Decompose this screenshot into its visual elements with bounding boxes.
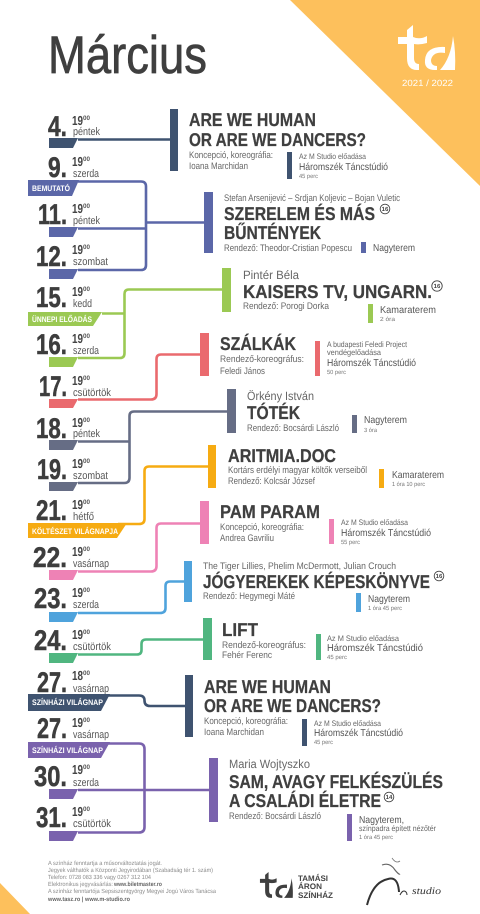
date: 16: 19 [72, 331, 83, 346]
text block: Rendező-koreográfus: [220, 354, 304, 365]
text block: BŰNTÉNYEK [224, 222, 322, 243]
date: 19: 00 [83, 458, 90, 465]
text block: Rendező: Porogi Dorka [243, 301, 330, 312]
date: 27 evening 19: 19 [72, 715, 83, 730]
text block: Rendező: Theodor-Cristian Popescu [224, 243, 352, 254]
venue [287, 152, 388, 180]
event: Kaisers TV, Ungarn [28, 268, 442, 367]
date: 15: kedd [73, 298, 92, 310]
badge: Színházi világnap [28, 694, 110, 711]
venue: színpadra épített nézőtér [359, 824, 436, 833]
date: 24: csütörtök [73, 641, 111, 653]
connector [118, 445, 216, 524]
text block: 16 [382, 206, 389, 213]
text block: Andrea Gavriliu [220, 533, 274, 544]
text block: OR ARE WE DANCERS? [204, 695, 381, 716]
logo: M Studio: studio [412, 886, 441, 897]
text block: JÓGYEREKEK KÉPESKÖNYVE [203, 571, 430, 592]
text block: PAM PARAM [220, 501, 320, 522]
text block: ARITMIA.DOC [228, 445, 336, 466]
logo: Tamási Áron Színház: SZÍNHÁZ [298, 890, 333, 900]
venue [316, 634, 423, 661]
text block: SAM, AVAGY FELKÉSZÜLÉS [229, 771, 443, 792]
text block: Maria Wojtyszko [229, 757, 310, 771]
text block: ARE WE HUMAN [189, 109, 316, 130]
date: 4: 19 [72, 113, 83, 128]
text block [220, 501, 320, 544]
date: 21: hétfő [73, 511, 94, 523]
venue: 45 perc [299, 173, 318, 180]
date: 21: 00 [83, 499, 90, 506]
event: Lift [49, 618, 423, 663]
venue: 1 óra 45 perc [368, 605, 402, 612]
date: 23: 19 [72, 585, 83, 600]
date: 23: 23. [34, 583, 67, 615]
badge: Színházi világnap [28, 742, 110, 758]
date: 16 [36, 329, 100, 361]
date: 24: 00 [83, 629, 90, 636]
venue: 45 perc [327, 654, 347, 661]
date: 12: 19 [72, 242, 83, 257]
venue: Nagyterem [368, 594, 410, 605]
date: 19: 19 [72, 456, 83, 471]
date: 27 evening 18: 18 [72, 668, 83, 683]
connector [49, 618, 212, 663]
event: Jógyerekek képeskönyve [49, 561, 444, 622]
text block [204, 676, 381, 738]
text block: 14 [386, 794, 393, 801]
date: 18: péntek [73, 428, 100, 440]
text block: Koncepció, koreográfia: [204, 716, 288, 727]
footer information: Telefon: 0728 083 336 vagy 0267 312 104 [48, 874, 152, 881]
venue: Az M Studio előadása [314, 719, 381, 728]
venue: Az M Studio előadása [299, 152, 366, 161]
text block: Fehér Ferenc [222, 650, 272, 661]
date: 27 evening 18: vasárnap [73, 683, 109, 695]
venue [347, 814, 436, 841]
text block: TÓTÉK [247, 402, 301, 423]
date: 15: 00 [83, 286, 90, 293]
date: 31: 19 [72, 804, 83, 819]
venue: 1 óra 10 perc [392, 481, 425, 488]
text block: LIFT [222, 619, 259, 640]
date: 18: 18. [36, 413, 67, 445]
venue: Az M Studio előadása [341, 518, 408, 527]
date: 17: csütörtök [73, 387, 111, 399]
text block: SZÁLKÁK [220, 333, 297, 354]
date: 9: szerda [73, 168, 100, 180]
date: 12 [36, 241, 108, 273]
venue: 45 perc [314, 739, 333, 746]
date: 9: 9. [48, 152, 67, 184]
date: 17 [39, 371, 111, 403]
text block [222, 619, 306, 661]
venue: Háromszék Táncstúdió [341, 528, 431, 539]
venue [315, 340, 416, 376]
connector [49, 561, 192, 622]
logo: Tamási Áron Színház: ÁRON [298, 881, 322, 891]
date: 22: 22. [33, 542, 67, 574]
event: Tóték [49, 389, 407, 491]
venue [302, 719, 403, 746]
text block [228, 445, 367, 487]
date: 9 [48, 152, 100, 184]
venue: Nagyterem [364, 415, 407, 426]
date: 27 evening 19: vasárnap [73, 729, 109, 741]
connector [49, 744, 218, 841]
footer information: A színház fenntartja a műsorváltoztatás jogát. [48, 860, 162, 867]
date: 18 [36, 413, 100, 445]
date: 4: péntek [73, 126, 100, 138]
date: 30: szerda [73, 777, 100, 789]
venue: Nagyterem [373, 243, 415, 254]
venue: vendégelőadása [327, 348, 382, 357]
date: 16: szerda [73, 345, 100, 357]
date: 30: 30. [34, 761, 67, 793]
date: 27 evening 19: 00 [83, 717, 90, 724]
venue: A budapesti Feledi Project [327, 340, 408, 349]
venue: 2 óra [380, 316, 396, 323]
connector [49, 501, 209, 580]
connector [49, 389, 236, 491]
text block: Stefan Arsenijević – Srdjan Koljevic – Bojan Vuletic [224, 193, 400, 204]
footer information: Elektronikus jegyvásárlás: [48, 881, 113, 888]
date: 31: csütörtök [73, 818, 111, 830]
badge: Színházi világnap: SZÍNHÁZI VILÁGNAP [32, 745, 104, 755]
connector [49, 182, 213, 279]
text block: Feledi János [220, 366, 265, 377]
footer information: www.tasz.ro | www.m-studio.ro [47, 896, 130, 903]
date: 31 [36, 802, 111, 834]
title: Március [48, 26, 207, 85]
date: 11: 11. [38, 199, 67, 231]
text block [220, 333, 304, 377]
timeline dates [33, 111, 111, 834]
text block: Koncepció, koreográfia: [189, 150, 273, 161]
date: 12: szombat [73, 256, 108, 268]
date: 11: 19 [72, 201, 83, 216]
logo: Tamási Áron Színház: TAMÁSI [298, 873, 328, 883]
connector [49, 268, 231, 367]
date: 16: 00 [83, 333, 90, 340]
date: 21 [36, 495, 94, 527]
date: 4: 00 [83, 115, 90, 122]
date: 19: 19. [37, 454, 67, 486]
venue: 3 óra [364, 427, 378, 434]
date: 18: 00 [83, 417, 90, 424]
date: 30: 19 [72, 762, 83, 777]
logo: theatre season [398, 25, 455, 88]
logo: M Studio [367, 858, 441, 905]
event: Szálkák [49, 333, 416, 408]
text block: Örkény István [247, 389, 314, 403]
date: 31: 31. [36, 802, 67, 834]
date: 27 evening 19: 27. [37, 713, 67, 745]
text block: OR ARE WE DANCERS? [189, 129, 366, 150]
connector [108, 675, 193, 737]
text block: Pintér Béla [243, 268, 299, 282]
date: 16: 16. [36, 329, 67, 361]
badge: Ünnepi előadás: ÜNNEPI ELŐADÁS [32, 314, 93, 324]
venue [361, 242, 415, 254]
venue [379, 469, 444, 488]
text block: The Tiger Lillies, Phelim McDermott, Julian Crouch [203, 561, 396, 572]
date: 17: 17. [39, 371, 67, 403]
venue: 55 perc [341, 539, 360, 546]
date: 27 evening 18: 27. [37, 667, 67, 699]
venue: Háromszék Táncstúdió [299, 162, 388, 173]
text block: Rendező: Bocsárdi László [247, 423, 339, 434]
text block: Ioana Marchidan [189, 161, 248, 172]
text block: Rendező: Kolcsár József [228, 476, 315, 487]
date: 18: 19 [72, 415, 83, 430]
text block: ARE WE HUMAN [204, 676, 331, 697]
date: 21: 19 [72, 497, 83, 512]
footer information: www.biletmaster.ro [113, 881, 162, 888]
badge: Ünnepi előadás [28, 312, 102, 326]
venue: Az M Studio előadása [327, 634, 400, 643]
date: 24 [34, 625, 111, 657]
text block: Rendező-koreográfus: [222, 640, 306, 651]
text block [224, 193, 400, 254]
logo: theatre season: 2021 / 2022 [402, 78, 453, 88]
date: 30: 00 [83, 764, 90, 771]
date: 4: 4. [48, 111, 67, 143]
event: Aritmia.doc [28, 445, 444, 538]
text block: Rendező: Bocsárdi László [229, 811, 321, 822]
venue: 50 perc [327, 369, 346, 376]
text block [203, 561, 444, 602]
date: 23 [34, 583, 100, 615]
event: Sam, avagy felkészülés [28, 742, 443, 841]
date: 9: 00 [83, 156, 90, 163]
text block: KAISERS TV, UNGARN. [243, 281, 432, 302]
corner triangle: bottom left [0, 883, 30, 914]
badge: Költészet világnapja [28, 523, 127, 538]
date: 17: 00 [83, 375, 90, 382]
text block: Rendező: Hegymegi Máté [203, 591, 295, 602]
date: 24: 24. [34, 625, 67, 657]
venue: Nagyterem, [359, 815, 404, 826]
logo: Tamási Áron Színház [260, 872, 333, 900]
date: 23: 00 [83, 587, 90, 594]
text block: Ioana Marchidan [204, 727, 264, 738]
venue: Kamaraterem [392, 470, 444, 481]
event: Szerelem és más bűntények [28, 180, 415, 279]
badge: Bemutató [28, 180, 79, 196]
date: 23: szerda [73, 599, 100, 611]
connector [49, 109, 178, 171]
venue [352, 415, 407, 434]
event: Pam Param [49, 501, 431, 580]
text block: Koncepció, koreográfia: [220, 522, 304, 533]
date: 27 evening 18: 00 [83, 670, 90, 677]
badge: Színházi világnap: SZÍNHÁZI VILÁGNAP [32, 697, 104, 707]
text block: Kortárs erdélyi magyar költők verseiből [228, 465, 367, 476]
date: 22: vasárnap [73, 558, 109, 570]
date: 15: 15. [36, 282, 67, 314]
venue [329, 518, 431, 546]
date: 11: 00 [83, 203, 90, 210]
venue: Háromszék Táncstúdió [314, 728, 403, 739]
date: 24: 19 [72, 627, 83, 642]
event: Are We Human 2 [28, 675, 403, 746]
date: 30 [34, 761, 100, 793]
badge: Bemutató: BEMUTATÓ [32, 183, 70, 193]
text block: SZERELEM ÉS MÁS [224, 203, 375, 224]
date: 12: 00 [83, 244, 90, 251]
venue [356, 593, 410, 612]
text block: 16 [434, 283, 441, 290]
date: 9: 19 [72, 154, 83, 169]
venue: Háromszék Táncstúdió [327, 358, 416, 369]
badge: Költészet világnapja: KÖLTÉSZET VILÁGNAPJA [32, 526, 118, 536]
event: Are We Human 1 [49, 109, 388, 180]
text block [243, 268, 442, 312]
date: 4 [48, 111, 100, 143]
venue: Kamaraterem [380, 305, 436, 316]
venue: Háromszék Táncstúdió [327, 643, 423, 654]
footer information: A színház fenntartója Sepsiszentgyörgy Megyei Jogú Város Tanácsa [48, 888, 217, 895]
date: 17: 19 [72, 373, 83, 388]
venue: 1 óra 45 perc [359, 834, 393, 841]
date: 22: 00 [83, 546, 90, 553]
date: 21: 21. [36, 495, 67, 527]
date: 27 evening 19 [37, 713, 109, 745]
date: 31: 00 [83, 806, 90, 813]
date: 27 evening 18 [37, 667, 109, 699]
corner triangle: top right [290, 0, 480, 186]
footer information: Jegyek válthatók a Központi Jegyirodában (Szabadság tér 1. szám) [48, 867, 213, 874]
connector [49, 333, 209, 408]
text block: 16 [436, 573, 443, 580]
footer information [47, 860, 217, 903]
date: 15: 19 [72, 284, 83, 299]
date: 22 [33, 542, 109, 574]
date: 19: szombat [73, 470, 108, 482]
date: 11 [38, 199, 100, 231]
venue [368, 304, 436, 323]
text block [247, 389, 339, 434]
text block [189, 109, 366, 172]
date: 12: 12. [36, 241, 67, 273]
date: 19 [37, 454, 108, 486]
date: 22: 19 [72, 544, 83, 559]
date: 11: péntek [73, 215, 100, 227]
text block [229, 757, 443, 822]
text block: A CSALÁDI ÉLETRE [229, 790, 381, 811]
